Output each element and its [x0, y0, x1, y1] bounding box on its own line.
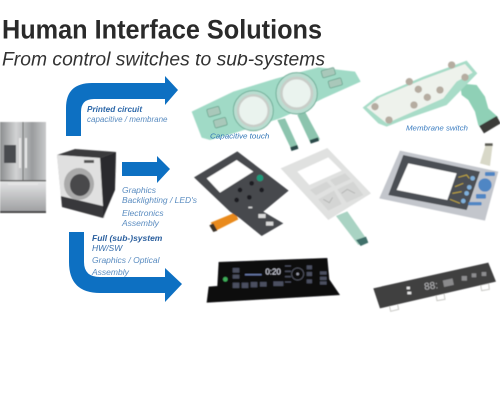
text: graphics list: Assembly: [121, 218, 160, 228]
icon: refrigerator: [0, 122, 46, 213]
text: graphics list: Electronics: [122, 208, 164, 218]
label: membrane switch: Membrane switch: [406, 126, 468, 133]
text: full sub-system: Assembly: [91, 267, 130, 277]
panel: black graphic overlay with orange tail: [194, 151, 289, 236]
panel: grey membrane keypad: [281, 148, 371, 246]
text: full sub-system: [91, 233, 163, 277]
text: printed circuit: capacitive / membrane: [87, 115, 168, 124]
text: graphics list: Graphics: [122, 185, 157, 195]
arrow: full sub-system: [69, 232, 182, 302]
panel: black appliance display: [207, 258, 340, 303]
panel: slim control strip: [373, 263, 496, 311]
arrow: graphics and electronics: [122, 156, 170, 183]
icon: washing machine: [57, 149, 116, 218]
panel: capacitive touch membrane: [192, 67, 361, 151]
panel: membrane switch: [363, 61, 500, 133]
title: Human Interface Solutions: [2, 14, 322, 44]
membrane body: [192, 67, 361, 140]
panel: slim control strip: 88:: [424, 280, 439, 293]
panel: black appliance display: 0:20: [265, 268, 281, 277]
text: printed circuit: Printed circuit: [87, 105, 142, 114]
subtitle: From control switches to sub-systems: [2, 50, 326, 70]
text: full sub-system: HW/SW: [92, 243, 123, 253]
text: printed circuit: [87, 105, 168, 124]
arrow: printed circuit: [66, 76, 178, 136]
panel: touch screen device: [379, 143, 498, 221]
text: full sub-system: Full (sub-)system: [92, 233, 163, 243]
text: graphics list: Backlighting / LED's: [122, 195, 198, 205]
text: graphics list: [121, 185, 198, 228]
label: capacitive touch: Capacitive touch: [210, 132, 269, 141]
text: full sub-system: Graphics / Optical: [92, 255, 161, 265]
